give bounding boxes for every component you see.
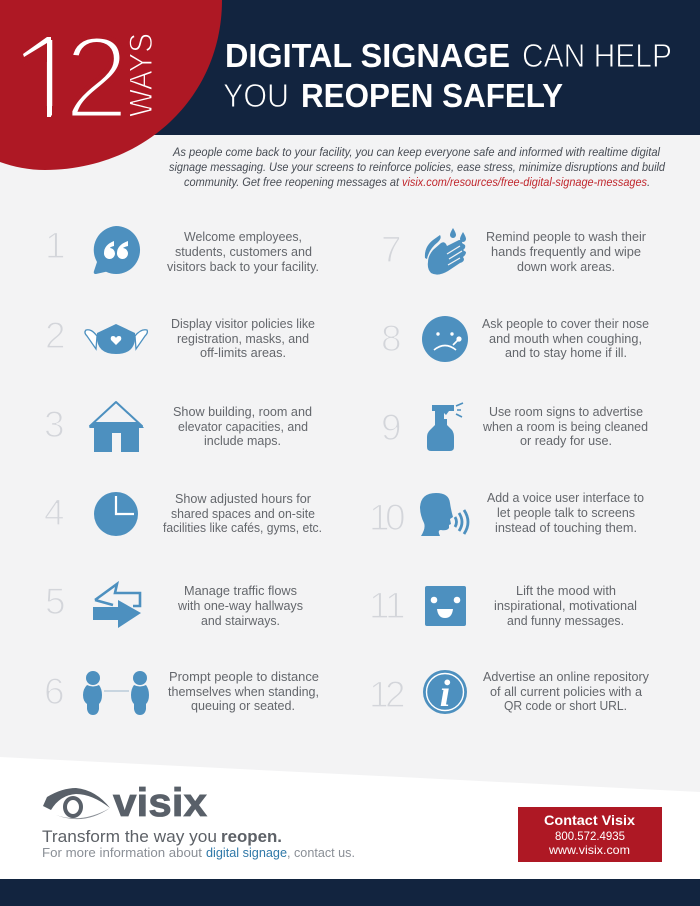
footer white panel [0,757,700,880]
text block: with one-way hallways [177,599,303,613]
contact note [42,846,355,860]
text block [486,230,646,274]
item 4 [44,492,322,536]
contact box [518,807,662,862]
icon: face mask with heart [85,324,147,354]
text block [173,405,312,448]
text block [171,317,315,360]
icon: clock [94,492,138,536]
item 1 [45,225,319,274]
numeral stroke of the 1 [23,37,51,117]
text block: registration, masks, and [177,332,309,346]
text block: shared spaces and on-site [171,507,315,521]
text block: Lift the mood with [516,584,616,598]
intro paragraph: signage messaging. Use your screens to reinforce policies, ease stress, minimize disruptions and build [169,160,665,174]
text block [494,584,637,628]
icon: two people distanced [83,671,149,715]
text block: Use room signs to advertise [489,405,643,419]
text block: Remind people to wash their [486,230,646,244]
text block: Display visitor policies like [171,317,315,331]
intro paragraph [169,145,665,189]
contact box: Contact Visix [544,812,635,828]
text block: Add a voice user interface to [487,491,644,505]
cover for numeral foot and flag [16,30,69,122]
item 6: 6 [44,671,65,712]
text block: hands frequently and wipe [491,245,641,259]
item 7: 7 [381,229,402,270]
text block: queuing or seated. [191,699,295,713]
item 9 [381,403,648,451]
text block: of all current policies with a [490,685,642,699]
text block: QR code or short URL. [504,699,627,713]
title line 2: REOPEN SAFELY [301,77,563,114]
text block [163,492,322,535]
item 6 [44,670,319,715]
text block: elevator capacities, and [178,420,308,434]
text block: facilities like cafés, gyms, etc. [163,521,322,535]
text block: visitors back to your facility. [167,260,319,274]
icon: house [89,402,144,452]
item 3 [44,402,312,452]
text block [487,491,644,535]
item 10: 10 [369,497,406,538]
icon: spray bottle [427,403,463,451]
item 11 [369,584,637,628]
item 2 [45,315,315,360]
header band [0,0,700,170]
item 5: 5 [45,581,66,622]
tagline: Transform the way you [42,827,217,846]
item 8 [381,316,649,362]
item 12 [369,670,650,715]
intro paragraph: As people come back to your facility, you can keep everyone safe and informed with realtime digital [172,145,660,159]
contact box: 800.572.4935 [555,829,625,843]
item 8: 8 [381,318,402,359]
title line 2: YOU [223,77,289,114]
title line 1 [225,37,672,74]
contact note: digital signage [206,846,287,860]
WAYS rotated: WAYS [123,33,159,117]
icon: talking head [420,493,468,536]
text block: off-limits areas. [200,346,286,360]
item 7 [381,228,646,275]
text block: and funny messages. [507,614,624,628]
text block: include maps. [204,434,281,448]
item 5 [45,581,303,628]
text block: inspirational, motivational [494,599,637,613]
text block: Manage traffic flows [184,584,297,598]
tagline: reopen. [221,827,282,846]
visix logo [43,781,207,825]
item 11: 11 [369,585,406,626]
text block: let people talk to screens [497,506,635,520]
text block: down work areas. [517,260,615,274]
intro paragraph: . [647,175,650,189]
text block: Show building, room and [173,405,312,419]
contact note: For more information about [42,846,203,860]
text block: students, customers and [175,245,312,259]
title line 1: DIGITAL SIGNAGE [225,37,510,74]
icon: info circle: i [440,673,451,715]
contact box: www.visix.com [548,843,630,857]
item 12: 12 [369,674,406,715]
intro paragraph: community. Get free reopening messages at [184,175,400,189]
big number 12: 12 [15,12,129,143]
text block: and stairways. [201,614,280,628]
text block: and to stay home if ill. [505,346,627,360]
text block: or ready for use. [520,434,612,448]
item 2: 2 [45,315,66,356]
text block [177,584,303,628]
text block: Ask people to cover their nose [482,317,649,331]
item 1: 1 [45,225,66,266]
contact note: , contact us. [287,846,355,860]
icon: smiling square [425,586,466,626]
item 4: 4 [44,492,65,533]
item 9: 9 [381,407,402,448]
text block: Prompt people to distance [169,670,319,684]
item 3: 3 [44,404,65,445]
red circle badge [0,0,222,170]
text block: instead of touching them. [495,521,637,535]
text block [483,670,650,713]
text block: Welcome employees, [184,230,302,244]
visix logo: visix [113,781,207,825]
text block: themselves when standing, [168,685,319,699]
text block: Advertise an online repository [483,670,650,684]
icon: sick face [422,316,468,362]
icon: info circle [423,670,467,715]
icon: two-way arrows [93,584,141,628]
icon: eye [43,788,110,819]
text block [167,230,319,274]
icon: speech bubble with quotes [94,226,140,274]
text block: and mouth when coughing, [489,332,642,346]
item 10 [369,491,644,538]
text block [168,670,319,713]
bottom navy band [0,879,700,906]
text block: Show adjusted hours for [175,492,311,506]
text block [482,405,648,448]
icon: washing hands [425,228,466,275]
intro paragraph: visix.com/resources/free-digital-signage-messages [402,175,647,189]
text block: when a room is being cleaned [482,420,648,434]
title line 1: CAN HELP [522,37,672,74]
text block [482,317,649,360]
